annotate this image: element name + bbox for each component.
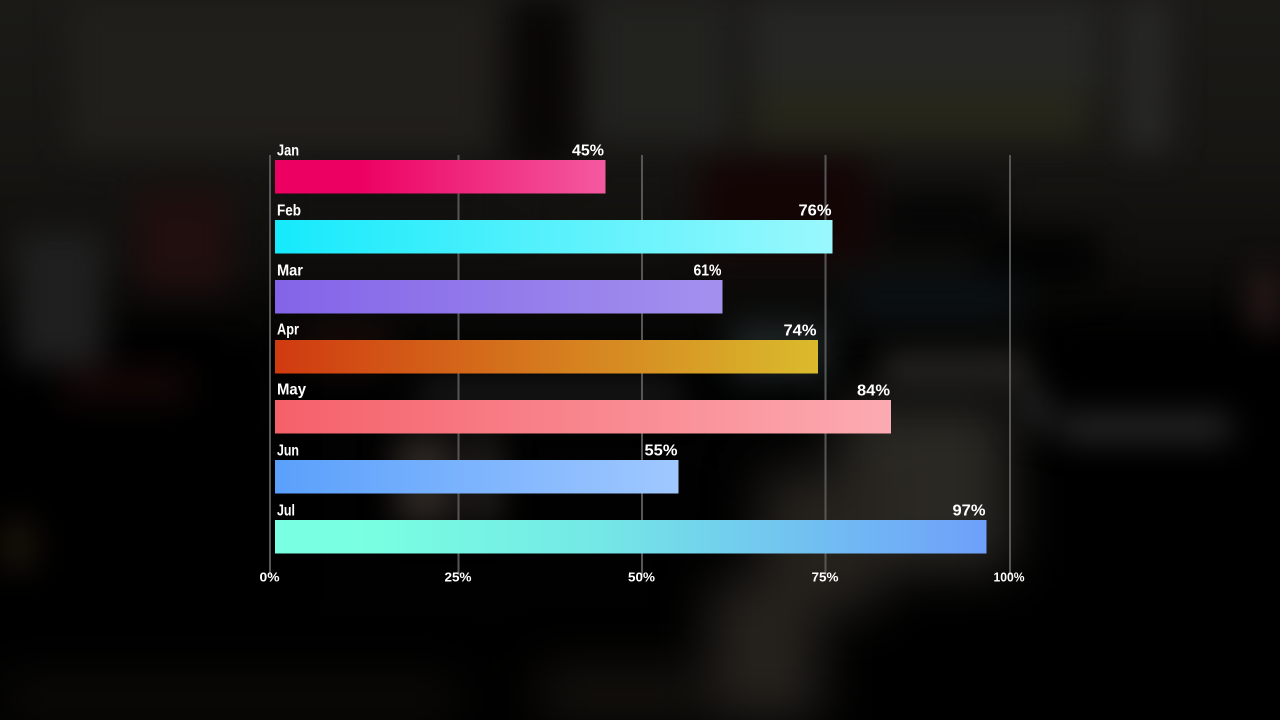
bar: May 84%: May (277, 382, 306, 398)
bar: Jan 45%: 45% (572, 142, 604, 160)
x axis labels: 50% (628, 570, 655, 584)
bar: Mar 61% (275, 262, 722, 314)
bar: Jan 45%: Jan (277, 142, 299, 160)
bar: Jan 45% (275, 142, 606, 194)
chart (260, 142, 1025, 584)
x axis labels (260, 570, 1025, 584)
bar: Apr 74% (275, 322, 818, 374)
bar: Feb 76%: 76% (798, 202, 832, 220)
x axis labels: 100% (994, 570, 1025, 584)
bar: Jun 55% (275, 442, 678, 494)
bar: Feb 76%: Feb (277, 202, 301, 220)
bar: Feb 76% (275, 202, 832, 254)
bar: Jun 55%: 55% (644, 442, 678, 460)
bar: Apr 74%: Apr (277, 322, 299, 338)
bar: Jul 97%: Jul (277, 502, 295, 520)
bar: Mar 61%: Mar (277, 262, 303, 280)
bar: Jul 97%: 97% (952, 502, 986, 520)
gridlines (270, 155, 1010, 575)
x axis labels: 75% (812, 570, 839, 584)
bar: May 84% (275, 382, 891, 434)
bar: Apr 74%: 74% (784, 322, 816, 340)
bar: Mar 61%: 61% (694, 262, 722, 280)
x axis labels: 25% (444, 570, 472, 584)
bar: Jun 55%: Jun (277, 442, 299, 460)
bar: May 84%: 84% (857, 382, 890, 400)
bar: Jul 97% (275, 502, 986, 554)
x axis labels: 0% (260, 570, 280, 584)
